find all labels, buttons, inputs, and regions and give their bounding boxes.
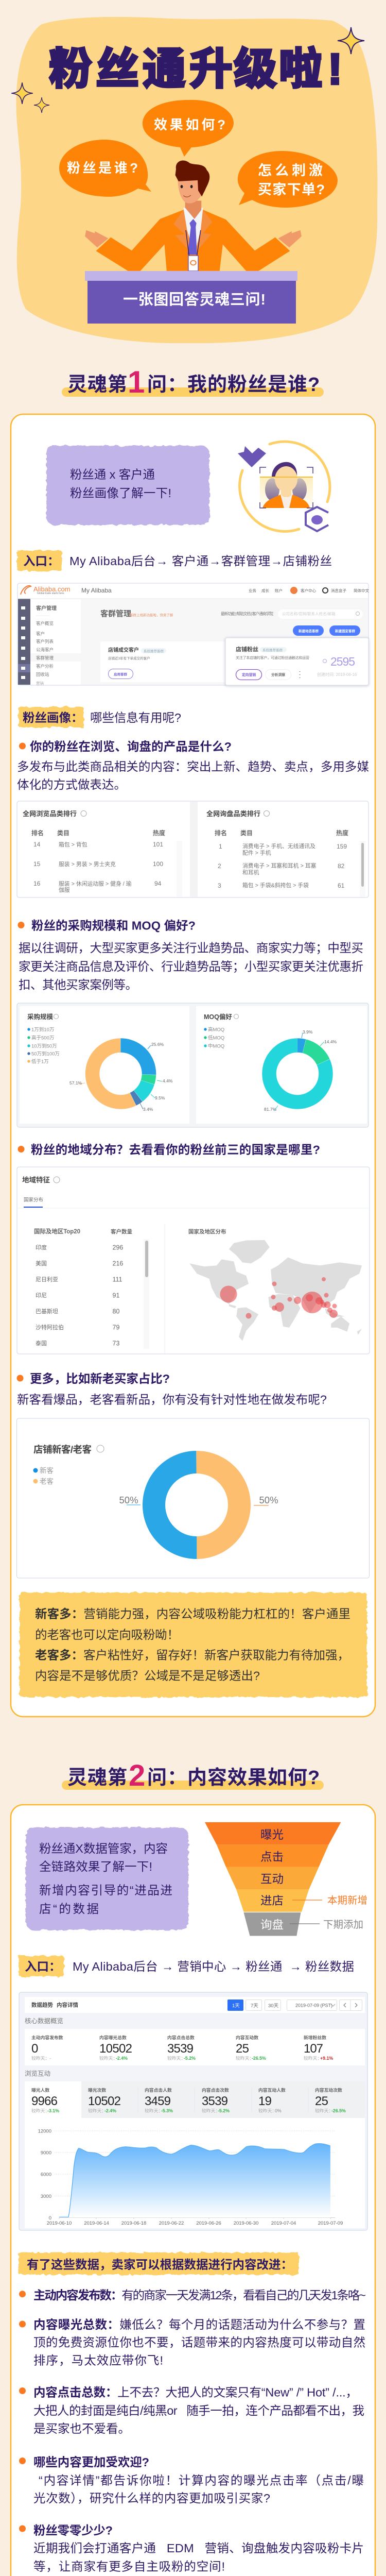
- screenshot: customer group management: 账户: [275, 588, 283, 593]
- dashboard: content data: 浏览互动: [25, 2070, 50, 2077]
- dashboard: content data: -26.5%: [252, 2056, 266, 2061]
- callout: fan tool intro: [46, 446, 209, 525]
- donut chart: MOQ preference: 高MOQ: [208, 1026, 224, 1032]
- dashboard: content data: 主动内容发布数: [31, 2035, 63, 2040]
- dashboard: content data: 曝光人数: [31, 2087, 49, 2093]
- area chart: 2019-06-30: [234, 2221, 258, 2226]
- funnel chart: 本期新增: [327, 1895, 367, 1906]
- text block: few fans: 粉丝零零少少?: [33, 2524, 113, 2537]
- map panel: geographic features: [17, 1167, 370, 1354]
- donut chart: purchase scale: 采购规模: [27, 1013, 54, 1021]
- donut chart: purchase scale: 25.6%: [151, 1042, 164, 1047]
- icon: star left large: [11, 82, 33, 104]
- dashboard: content data: 1天: [232, 2003, 240, 2009]
- screenshot: customer group management: [17, 583, 369, 686]
- dashboard: content data: 107: [304, 2042, 323, 2056]
- speech bubble: who are fans: 粉丝是谁?: [67, 160, 138, 176]
- funnel chart: 曝光: [260, 1828, 284, 1841]
- text block: exposure: 顶的免费资源位你也不要，话题带来的内容热度可以带动自然: [33, 2336, 365, 2349]
- screenshot: customer group management: 客户概览: [36, 621, 54, 626]
- screenshot: customer group management: 公司名称/官网/联系人姓名/邮箱: [282, 611, 336, 616]
- area chart: 12000: [38, 2129, 51, 2134]
- table: category rankings: 2: [218, 862, 221, 870]
- dashboard: content data: 内容互动次数: [315, 2087, 342, 2093]
- donut chart: MOQ preference: MOQ偏好: [204, 1013, 232, 1021]
- heading: question 2: 问：内容效果如何?: [147, 1767, 320, 1789]
- table: category rankings: 类目: [240, 829, 253, 837]
- text block: few fans: [19, 2524, 364, 2573]
- dashboard: content data: 较昨天：: [202, 2108, 220, 2113]
- text block: publish count: 主动内容发布数：有的商家一天发满12条，看看自己的几天发1条咯~: [33, 2289, 366, 2302]
- screenshot: customer group management: 客户列表: [36, 639, 54, 644]
- screenshot: customer group management: 回收站: [36, 672, 49, 677]
- table: category rankings: 15: [33, 860, 41, 868]
- donut chart: MOQ preference: 81.7%: [264, 1107, 277, 1112]
- dashboard: content data: 25: [236, 2042, 249, 2056]
- table: category rankings: 100: [153, 860, 163, 868]
- icon: face scan portrait: [238, 442, 330, 531]
- dashboard: content data: 较昨天：: [88, 2108, 106, 2113]
- text block: purchase scale and MOQ: 粉丝的采购规模和 MOQ 偏好?: [31, 919, 196, 933]
- table: category rankings: 全网询盘品类排行: [206, 810, 260, 818]
- heading: question 2: 2: [129, 1759, 145, 1792]
- screenshot: customer group management: 营销: [36, 681, 44, 686]
- funnel chart: 进店: [260, 1894, 284, 1907]
- donut chart: MOQ preference: 中MOQ: [208, 1043, 224, 1049]
- map panel: geographic features: 73: [112, 1340, 119, 1347]
- dashboard: content data: 7天: [251, 2003, 258, 2009]
- dashboard: content data: 曝光次数: [88, 2087, 106, 2093]
- map panel: geographic features: 国家及地区分布: [188, 1228, 226, 1235]
- entry path: 入口：: [25, 1960, 61, 1973]
- map panel: geographic features: 沙特阿拉伯: [36, 1324, 64, 1331]
- dashboard: content data: 数据趋势: [31, 2002, 53, 2008]
- screenshot: customer group management: 店铺成交客户: [108, 647, 139, 653]
- screenshot: customer group management: 客户中心: [301, 588, 316, 593]
- text block: clicks: [19, 2385, 364, 2435]
- table: category rankings: 热度: [336, 829, 348, 837]
- world map: [189, 1240, 362, 1341]
- donut chart: purchase scale: 1万到10万: [31, 1026, 54, 1032]
- screenshot: customer group management: 创建时间: 2019-06-16: [317, 672, 357, 677]
- heading: geographic distribution: 粉丝的地域分布？去看看你的粉丝前三的国家是哪里?: [31, 1143, 320, 1156]
- table: category rankings: 伽服: [59, 886, 70, 893]
- donut chart: purchase scale: 10万到50万: [31, 1043, 57, 1049]
- text block: few fans: 近期我们会打通客户通 EDM 营销、询盘触发内容吸粉卡片: [33, 2541, 364, 2555]
- screenshot: customer group management: 分析洞察: [271, 672, 285, 677]
- fan profile heading: 哪些信息有用呢?: [90, 711, 181, 724]
- table: category rankings: 101: [153, 841, 163, 848]
- heading: question 1: 问：我的粉丝是谁?: [147, 374, 320, 396]
- heading: question 2: 灵魂第: [67, 1767, 128, 1789]
- funnel chart: 询盘: [260, 1919, 284, 1931]
- text block: purchase scale and MOQ: 家更关注商品信息及评价、行业趋势品等；小型买家更关注优惠折: [19, 960, 363, 973]
- table: category rankings: 82: [338, 862, 345, 870]
- area chart: [38, 2129, 343, 2226]
- table: category rankings: 箱包 > 背包: [59, 841, 87, 848]
- screenshot: customer group management: 店铺近3年有下单成交的客户: [108, 656, 150, 660]
- screenshot: customer group management: 定向营销: [242, 672, 256, 677]
- title: 粉丝通升级啦!: [49, 45, 342, 93]
- screenshot: customer group management: 系统推荐客群: [144, 649, 164, 653]
- text block: few fans: 等，让商家有更多自主吸粉的空间!: [33, 2560, 225, 2573]
- callout: data tool intro: [26, 1827, 188, 1930]
- map panel: geographic features: 印尼: [36, 1292, 47, 1299]
- donut chart: new vs returning customers: 店铺新客/老客: [33, 1444, 92, 1455]
- table: category rankings: 16: [33, 880, 41, 887]
- map panel: geographic features: 91: [112, 1292, 119, 1299]
- heading: data driven improvement: 有了这些数据，卖家可以根据数据进行内容改进：: [27, 2258, 293, 2272]
- table: category rankings: 排名: [215, 829, 227, 837]
- speech bubble: results: [143, 100, 234, 157]
- area chart: 3000: [41, 2194, 51, 2199]
- text block: exposure: 排序，马太效应带你飞!: [33, 2353, 163, 2367]
- dashboard: content data: 9966: [31, 2094, 58, 2108]
- donut chart: MOQ preference: 3.9%: [303, 1029, 313, 1035]
- table: category rankings: 61: [338, 882, 345, 889]
- dashboard: content data: 较昨天：: [304, 2055, 322, 2061]
- dashboard: content data: 新增粉丝数: [304, 2035, 326, 2040]
- area chart: 9000: [41, 2150, 51, 2156]
- table: category rankings: 配件 > 手机: [242, 849, 271, 856]
- screenshot: customer group management: 客户: [36, 631, 45, 636]
- area chart: 2019-06-10: [47, 2221, 72, 2226]
- area chart: 2019-07-09: [318, 2221, 343, 2226]
- dashboard: content data: 内容点击总数: [167, 2035, 195, 2040]
- map panel: geographic features: 泰国: [36, 1340, 47, 1347]
- hero panel: [11, 17, 377, 343]
- callout: fan tool intro: 粉丝通 x 客户通: [70, 468, 155, 481]
- map panel: geographic features: 216: [112, 1260, 123, 1267]
- table: category rankings: 3: [218, 882, 221, 889]
- callout: data tool intro: 新增内容引导的“进品进: [39, 1884, 172, 1897]
- dashboard: content data: 较昨天：: [236, 2055, 254, 2061]
- dashboard: content data: 0%: [275, 2108, 282, 2113]
- screenshot: customer group management: 客户管理: [36, 605, 57, 612]
- dashboard: content data: 2019-07-09 (PST): [295, 2003, 332, 2008]
- screenshot: customer group management: 客群管理: [36, 655, 54, 660]
- speech bubble: stimulate orders: [238, 151, 338, 208]
- dashboard: content data: 0: [31, 2042, 38, 2056]
- donut chart: purchase scale: 3.4%: [143, 1107, 153, 1112]
- screenshot: customer group management: 店铺粉丝: [236, 646, 258, 653]
- text block: products browsed: [17, 740, 369, 791]
- screenshot: customer group management: 客群管理: [100, 609, 131, 618]
- map panel: geographic features: 79: [112, 1324, 119, 1331]
- text block: new vs returning buyers: 更多，比如新老买家占比?: [30, 1372, 170, 1385]
- table: category rankings: 和耳机: [242, 869, 259, 876]
- screenshot: customer group management: 新建固定客群: [335, 629, 355, 633]
- map panel: geographic features: 客户数量: [111, 1228, 132, 1235]
- text block: popular content: “内容详情”都告诉你啦！计算内容的曝光点击率（点击/曝: [39, 2474, 364, 2487]
- icon: star left small: [34, 97, 49, 113]
- funnel chart: 下期添加: [323, 1919, 363, 1930]
- text block: clicks: 内容点击总数：上不去？大把人的文案只有“New” /” Hot” /...，: [33, 2385, 358, 2399]
- table: category rankings: 94: [154, 880, 162, 887]
- donut chart: new vs returning customers: 50%: [119, 1495, 138, 1505]
- panel: question 1 card: [11, 414, 375, 1717]
- callout: new vs returning advice: 新客多：营销能力强，内容公域吸粉能力杠杠的！客户通里: [35, 1607, 350, 1621]
- text block: popular content: 哪些内容更加受欢迎?: [33, 2455, 149, 2469]
- donut chart: purchase scale: 4.4%: [163, 1078, 173, 1083]
- dashboard: content data: 19: [258, 2094, 272, 2108]
- screenshot: customer group management: 公海客户: [36, 647, 54, 652]
- funnel chart: 点击: [260, 1851, 284, 1863]
- text block: clicks: 大把人的封面是纯白/纯黑or 随手一拍，连个产品都看不出，我: [33, 2404, 364, 2417]
- text block: products browsed: 体化的方式做表达。: [17, 778, 126, 791]
- area chart: 2019-06-22: [159, 2221, 184, 2226]
- table: category rankings: 159: [337, 843, 347, 850]
- dashboard: content data: -2.4%: [104, 2108, 116, 2113]
- dashboard: content data: 内容互动人数: [258, 2087, 286, 2093]
- dashboard: content data: -5.2%: [184, 2056, 196, 2061]
- table: category rankings: 14: [33, 841, 41, 848]
- text block: purchase scale and MOQ: 扣、其他买家案例等。: [19, 978, 137, 992]
- donut chart: MOQ preference: [204, 1013, 337, 1112]
- map panel: geographic features: 地域特征: [22, 1176, 50, 1184]
- donut chart: purchase scale: 低于1万: [31, 1058, 49, 1064]
- speech bubble: stimulate orders: 买家下单?: [258, 182, 325, 197]
- map panel: geographic features: 80: [112, 1308, 119, 1315]
- donut chart: purchase scale: 9.5%: [155, 1095, 165, 1100]
- entry path: [17, 550, 332, 571]
- text block: new vs returning buyers: [16, 1372, 327, 1406]
- heading: data driven improvement: [19, 2252, 299, 2275]
- table: category rankings: 箱包 > 手袋&斜挎包 > 手袋: [242, 882, 309, 889]
- callout: fan tool intro: 粉丝画像了解一下!: [70, 486, 171, 500]
- text block: products browsed: 多发布与此类商品相关的内容：突出上新、趋势、卖点，多用多媒: [17, 760, 369, 773]
- callout: new vs returning advice: 内容是不是够优质？公域是不是足够透出?: [35, 1669, 260, 1682]
- table: category rankings: 排名: [31, 829, 44, 837]
- donut chart: purchase scale: 50万到100万: [31, 1051, 60, 1057]
- dashboard: content data: 3539: [167, 2042, 194, 2056]
- dashboard: content data: [19, 1992, 367, 2230]
- area chart: 0: [49, 2215, 51, 2221]
- screenshot: customer group management: 成长: [261, 588, 269, 593]
- icon: star top right: [338, 27, 364, 54]
- dashboard: content data: 较昨天：: [315, 2108, 333, 2113]
- table: category rankings: 全网浏览品类排行: [23, 810, 77, 818]
- text block: exposure: [19, 2318, 365, 2367]
- callout: new vs returning advice: 老客多：客户粘性好，留存好！新客户获取能力有待加强，: [35, 1648, 349, 1662]
- callout: data tool intro: 粉丝通X数据管家，内容: [39, 1842, 168, 1855]
- donut chart: new vs returning customers: 新客: [40, 1466, 54, 1475]
- screenshot: customer group management: My Alibaba: [81, 587, 112, 594]
- screenshot: customer group management: 业务: [249, 588, 256, 593]
- dashboard: content data: 内容互动数: [236, 2035, 258, 2040]
- text block: clicks: 是买家也不爱看。: [33, 2422, 130, 2435]
- entry path: 入口：: [23, 554, 60, 568]
- dashboard: content data: 3459: [145, 2094, 171, 2108]
- table: category rankings: 服装 > 男装 > 男士夹克: [59, 861, 116, 868]
- screenshot: customer group management: 启用客群: [114, 672, 128, 676]
- screenshot: customer group management: 2595: [330, 655, 355, 668]
- donut chart: MOQ preference: 14.4%: [324, 1039, 337, 1044]
- table: category rankings: 消费电子 > 手机、无线通讯及: [242, 842, 315, 850]
- dashboard: content data: 核心数据概览: [25, 2017, 63, 2025]
- area chart: 2019-06-18: [121, 2221, 146, 2226]
- dashboard: content data: 内容点击次数: [202, 2087, 229, 2093]
- dashboard: content data: -26.5%: [331, 2108, 346, 2113]
- donut chart: MOQ preference: 低MOQ: [208, 1035, 224, 1041]
- table: category rankings: 类目: [57, 829, 69, 837]
- podium label: 一张图回答灵魂三问!: [123, 291, 266, 308]
- speech bubble: results: 效果如何?: [154, 117, 225, 132]
- screenshot: customer group management: 最新功能 | 帮助文档 | 客户通商学院: [221, 611, 273, 616]
- donut chart: purchase scale: 高于500万: [31, 1035, 54, 1041]
- heading: question 1: 灵魂第: [67, 374, 128, 396]
- dashboard: content data: 30天: [268, 2003, 279, 2009]
- text block: new vs returning buyers: 新客看爆品，老客看新品，你有没有针对性地在做发布呢?: [17, 1393, 327, 1406]
- donut chart: new vs returning customers: 老客: [40, 1477, 54, 1485]
- dashboard: content data: -5.2%: [218, 2108, 230, 2113]
- dashboard: content data: 较昨天：: [99, 2055, 117, 2061]
- speech bubble: stimulate orders: 怎么刺激: [258, 163, 323, 178]
- podium: [85, 271, 297, 324]
- entry path: My Alibaba后台 → 营销中心 → 粉丝通 → 粉丝数据: [73, 1960, 354, 1973]
- text block: popular content: [19, 2455, 364, 2505]
- screenshot: customer group management: Alibaba.com: [33, 585, 71, 593]
- map panel: geographic features: 111: [112, 1276, 122, 1283]
- area chart: 2019-06-26: [196, 2221, 221, 2226]
- heading: question 1: 1: [128, 365, 145, 399]
- screenshot: customer group management: 客群上线新功能啦，快来了解: [130, 613, 173, 617]
- table: category rankings: 消费电子 > 耳塞和耳机 > 耳塞: [242, 862, 317, 869]
- dashboard: content data: -5.3%: [161, 2108, 173, 2113]
- callout: data tool intro: 全链路效果了解一下!: [39, 1860, 152, 1873]
- callout: data tool intro: 店“的数据: [39, 1902, 99, 1916]
- dashboard: content data: 25: [315, 2094, 328, 2108]
- map panel: geographic features: 国家分布: [24, 1197, 43, 1203]
- funnel chart: 互动: [260, 1873, 284, 1886]
- screenshot: customer group management: 消息盒子: [331, 588, 346, 593]
- screenshot: customer group management: 客户分析: [36, 664, 54, 669]
- table: category rankings: 1: [219, 843, 222, 850]
- fan profile heading: 粉丝画像：: [23, 711, 83, 724]
- entry path: My Alibaba后台→ 客户通→客群管理→店铺粉丝: [69, 554, 332, 568]
- heading: question 2: [62, 1759, 324, 1792]
- donut chart: new vs returning customers: 50%: [259, 1495, 278, 1505]
- dashboard: content data: 较昨天：: [258, 2108, 276, 2113]
- table: category rankings: [17, 801, 369, 897]
- chart panel: purchase scale and MOQ donuts: [17, 1003, 369, 1127]
- speech bubble: who are fans: [59, 140, 151, 197]
- dashboard: content data: 内容曝光总数: [99, 2035, 127, 2040]
- text block: purchase scale and MOQ: 据以往调研，大型买家更多关注行业趋势品、商家实力等；中型买: [19, 941, 363, 955]
- panel: question 2 card: [11, 1805, 375, 2576]
- dashboard: content data: 内容点击人数: [145, 2087, 172, 2093]
- dashboard: content data: 3539: [202, 2094, 228, 2108]
- map panel: geographic features: 美国: [36, 1260, 47, 1267]
- screenshot: customer group management: 简体中文: [354, 588, 369, 593]
- entry path: [19, 1956, 354, 1976]
- dashboard: content data: 内容详情: [57, 2002, 78, 2008]
- map panel: geographic features: 尼日利亚: [36, 1276, 58, 1283]
- screenshot: customer group management: 新建动态客群: [299, 629, 319, 633]
- dashboard: content data: 较昨天：: [145, 2108, 163, 2113]
- map panel: geographic features: 296: [112, 1244, 123, 1251]
- map panel: geographic features: 印度: [36, 1244, 47, 1251]
- screenshot: customer group management: 系统推荐客群: [262, 648, 283, 652]
- text block: exposure: 内容曝光总数：嫌低么？每个月的话题活动为什么不参与？置: [33, 2318, 365, 2331]
- illustration: presenter: [85, 160, 302, 271]
- funnel chart: [205, 1822, 367, 1936]
- dashboard: content data: 较昨天：-: [31, 2055, 51, 2061]
- heading: question 1: [62, 365, 324, 399]
- text block: popular content: 光次数），研究什么样的内容更加吸引买家?: [33, 2492, 270, 2505]
- table: category rankings: 热度: [153, 829, 165, 837]
- donut chart: purchase scale: [27, 1013, 173, 1112]
- dashboard: content data: 较昨天：: [31, 2108, 49, 2113]
- area chart: 2019-06-14: [84, 2221, 109, 2226]
- text block: purchase scale and MOQ: [17, 919, 363, 992]
- dashboard: content data: 10502: [99, 2042, 132, 2056]
- dashboard: content data: 10502: [88, 2094, 121, 2108]
- area chart: 6000: [41, 2172, 51, 2177]
- table: category rankings: 服装 > 休闲运动服 > 健身 / 瑜: [59, 880, 132, 887]
- map panel: geographic features: 国际及地区Top20: [34, 1228, 80, 1235]
- dashboard: content data: 较昨天：: [167, 2055, 185, 2061]
- text block: products browsed: 你的粉丝在浏览、询盘的产品是什么?: [30, 740, 232, 753]
- map panel: geographic features: 巴基斯坦: [36, 1308, 58, 1315]
- callout: new vs returning advice: 的老客也可以定向吸粉呦！: [35, 1628, 179, 1641]
- dashboard: content data: -3.1%: [47, 2108, 59, 2113]
- area chart: 2019-07-04: [271, 2221, 296, 2226]
- callout: new vs returning advice: [20, 1592, 367, 1697]
- dashboard: content data: -2.4%: [116, 2056, 128, 2061]
- screenshot: customer group management: Global trade starts here.: [37, 592, 65, 595]
- dashboard: content data: +9.1%: [320, 2056, 333, 2061]
- donut chart: new vs returning customers: [16, 1418, 370, 1578]
- donut chart: purchase scale: 57.1%: [69, 1080, 82, 1086]
- fan profile heading: [19, 707, 181, 727]
- screenshot: customer group management: 关注了本店铺的客户，可通过粉丝通触达和运营: [236, 655, 309, 660]
